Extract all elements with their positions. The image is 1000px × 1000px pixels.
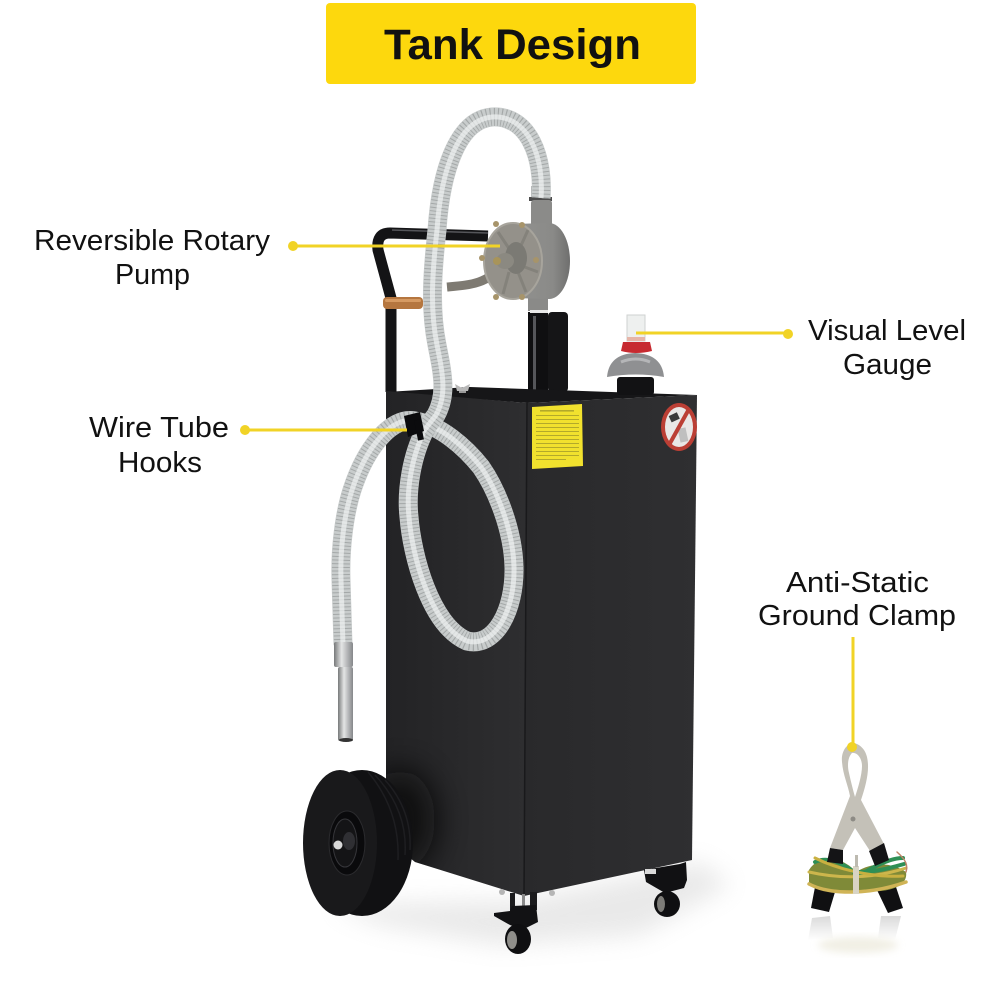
insulated tips behind [811,884,903,913]
callout: reversible rotary pump [34,225,500,291]
wooden grip [383,297,423,309]
visual level gauge [607,315,664,395]
rear loop of hose [341,421,514,645]
insulated tips front [827,843,889,866]
handle frame [378,230,488,392]
callout: reversible rotary pump: Reversible Rotary [34,225,270,257]
clamp jaws [830,743,884,851]
yellow warning label [532,404,583,469]
wing nut on lid [455,384,470,393]
callout: anti-static ground clamp: Anti-Static [786,567,929,599]
ground clamp with wire [808,743,907,953]
fuel tank cart [303,117,697,954]
upper hose from pump [423,117,541,432]
tank body [365,387,697,896]
wire tube hook [404,412,424,440]
callout: visual level gauge [636,315,966,381]
title banner: Tank Design [384,21,641,69]
metal nozzle [334,642,353,742]
rotary pump [447,186,570,313]
floor shadow [330,862,730,945]
no-phone safety sticker [661,403,697,451]
callout: wire tube hooks [89,412,407,479]
callout: wire tube hooks: Wire Tube [89,412,229,444]
callout: visual level gauge: Gauge [843,349,932,381]
callout: anti-static ground clamp [758,567,956,752]
rear swivel caster [644,862,687,917]
clamp reflection [808,916,901,953]
cable tie [853,855,859,894]
callout: visual level gauge: Visual Level [808,315,966,347]
title banner [326,3,696,84]
callout: reversible rotary pump: Pump [115,259,190,291]
front swivel caster [494,889,555,954]
wire coil [809,852,907,892]
large rubber wheel [303,770,413,916]
callout: wire tube hooks: Hooks [118,447,202,479]
callout: anti-static ground clamp: Ground Clamp [758,600,956,632]
pipe and filter cap [528,312,568,396]
